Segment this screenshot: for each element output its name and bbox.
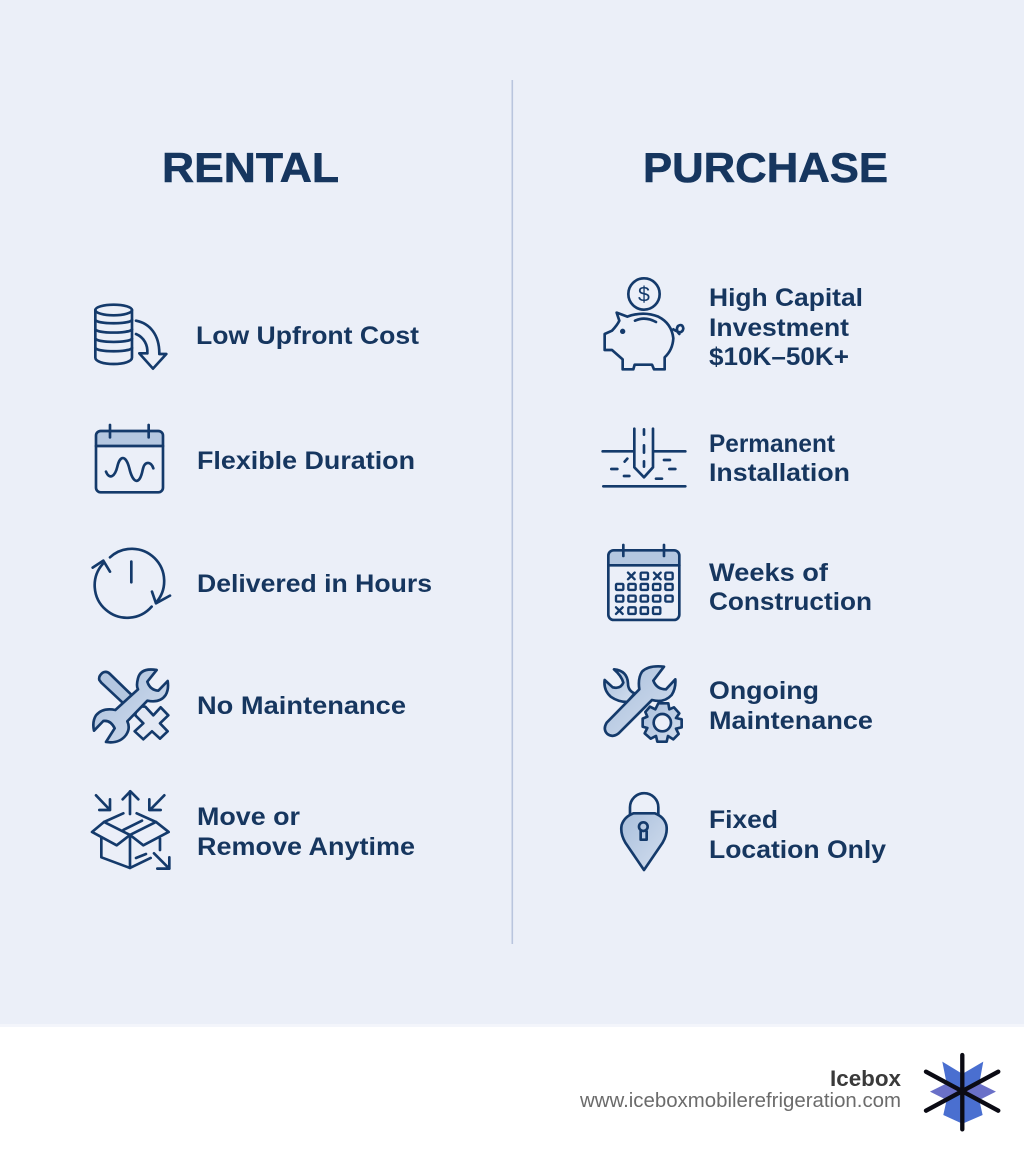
row: high capital investment: $10K–50K+ bbox=[709, 343, 849, 371]
label: Low Upfront Cost bbox=[196, 322, 420, 350]
icon: piggy bank with coin bbox=[605, 278, 683, 369]
row: move or remove anytime bbox=[92, 791, 415, 869]
row: high capital investment bbox=[605, 278, 863, 371]
icon: snowflake logo bbox=[926, 1055, 998, 1129]
row: fixed location only: Location Only bbox=[709, 836, 886, 864]
icon: piggy bank with coin: $ bbox=[638, 282, 650, 306]
row: move or remove anytime: Remove Anytime bbox=[197, 833, 415, 861]
column: purchase bbox=[603, 144, 888, 870]
row: flexible duration bbox=[96, 425, 415, 492]
row: permanent installation: Installation bbox=[709, 459, 850, 487]
icon: post in ground bbox=[603, 429, 685, 486]
website: www.iceboxmobilerefrigeration.com bbox=[579, 1090, 901, 1112]
label: Ongoing bbox=[709, 677, 819, 705]
row: permanent installation bbox=[603, 429, 850, 487]
row: ongoing maintenance: Maintenance bbox=[709, 707, 873, 735]
row: delivered in hours bbox=[93, 549, 432, 618]
icon: circular clock arrows bbox=[93, 549, 170, 618]
row: fixed location only bbox=[621, 793, 886, 870]
icon: lock pin bbox=[621, 793, 667, 870]
row: weeks of construction bbox=[608, 545, 872, 620]
row: high capital investment: Investment bbox=[709, 314, 850, 342]
row: no maintenance bbox=[93, 669, 406, 742]
icon: box with arrows bbox=[92, 791, 169, 869]
icon: calendar with wave bbox=[96, 425, 163, 492]
row: weeks of construction: Construction bbox=[709, 588, 872, 616]
label: Weeks of bbox=[709, 559, 829, 587]
label: Fixed bbox=[709, 806, 778, 834]
row: low upfront cost bbox=[95, 305, 420, 369]
label: Delivered in Hours bbox=[197, 570, 432, 598]
row: ongoing maintenance bbox=[604, 666, 873, 742]
icon: coin stack with down arrow bbox=[95, 305, 166, 369]
footer bbox=[0, 1024, 1024, 1154]
icon: crossed tools bbox=[93, 669, 168, 742]
brand name: Icebox bbox=[830, 1066, 902, 1091]
label: Permanent bbox=[709, 430, 836, 458]
icon: calendar grid bbox=[608, 545, 679, 620]
label: No Maintenance bbox=[197, 692, 406, 720]
label: Flexible Duration bbox=[197, 447, 415, 475]
column: rental bbox=[92, 144, 432, 869]
label: High Capital bbox=[709, 284, 863, 312]
heading: rental: RENTAL bbox=[162, 144, 339, 191]
label: Move or bbox=[197, 803, 300, 831]
heading: purchase: PURCHASE bbox=[643, 144, 888, 191]
icon: wrenches and gear bbox=[604, 666, 682, 742]
